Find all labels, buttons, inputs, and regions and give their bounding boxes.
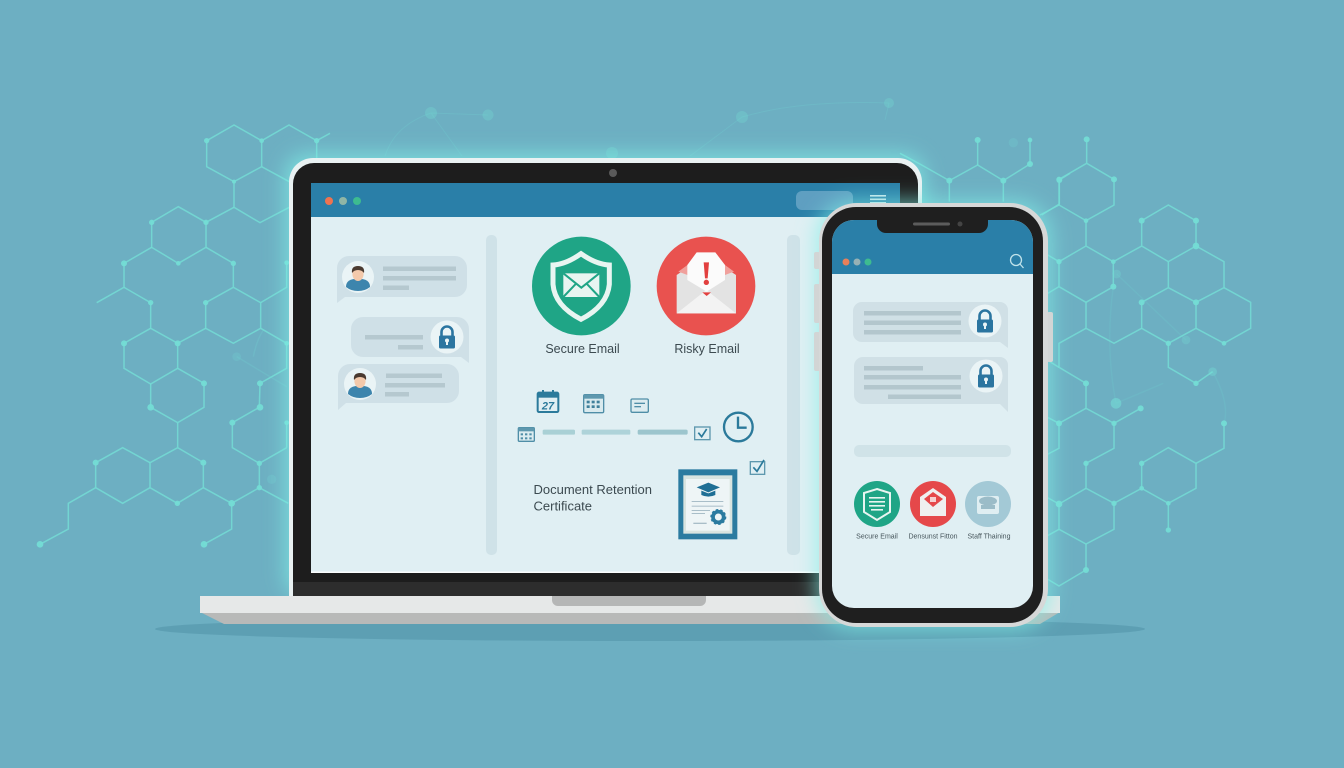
- phone glow: [816, 200, 1052, 630]
- faint top network: [385, 98, 894, 159]
- phone icon labels: Densunst Fitton: [908, 534, 958, 540]
- phone icon labels: Secure Email: [856, 534, 898, 540]
- phone body: [819, 203, 1048, 627]
- phone icon labels: [856, 534, 1011, 540]
- icon: secure email shield: [532, 237, 631, 335]
- laptop: [200, 154, 1060, 624]
- laptop screen: [311, 183, 900, 573]
- left hexagon network: [37, 125, 330, 548]
- icon: lock: [970, 360, 1002, 392]
- laptop base: [200, 596, 1060, 624]
- icon: document: [631, 399, 648, 412]
- phone search bar: [854, 445, 1011, 457]
- icon: clock: [724, 413, 753, 441]
- phone message 2: [854, 357, 1008, 412]
- icon: phone secure email: [854, 481, 900, 527]
- certificate label: Document Retention: [534, 482, 652, 497]
- icon: avatar: [344, 368, 376, 400]
- laptop glow: [285, 154, 925, 598]
- icon: phone training: [965, 481, 1011, 527]
- right hexagon network: [1037, 136, 1251, 586]
- label: risky email: Risky Email: [674, 342, 740, 356]
- chat bubble 1: [337, 256, 467, 303]
- icon: calendar 27: 27: [541, 400, 555, 412]
- browser header bar: [311, 183, 900, 217]
- icon: risky email envelope: [657, 237, 755, 335]
- icon: lock: [968, 304, 1002, 338]
- icon: checkbox: [695, 427, 710, 440]
- icon: small calendar: [518, 428, 534, 441]
- chat bubble 2: [351, 317, 469, 363]
- laptop lid: [289, 158, 922, 596]
- icon: lock: [430, 320, 464, 354]
- top right network fragment: [900, 137, 1070, 215]
- icon: calendar 27: [538, 390, 558, 412]
- phone header: [832, 219, 1033, 274]
- label: secure email: Secure Email: [545, 342, 620, 356]
- icon: calendar grid: [584, 395, 604, 413]
- phone icon labels: Staff Thaining: [968, 534, 1011, 540]
- phone: [814, 200, 1053, 630]
- icon: avatar: [342, 261, 374, 293]
- sidebar dividers: [486, 235, 800, 555]
- icon: certificate: [678, 469, 737, 539]
- retention timeline: [518, 390, 765, 539]
- phone message 1: [853, 302, 1008, 348]
- laptop shadow: [155, 617, 1145, 641]
- timeline bars: [543, 430, 688, 435]
- chat bubble 3: [338, 364, 459, 410]
- icon: phone red envelope: [910, 481, 956, 527]
- icon: certificate checkbox: [750, 460, 765, 474]
- side buttons: [814, 252, 1053, 371]
- certificate label: Certificate: [534, 498, 592, 514]
